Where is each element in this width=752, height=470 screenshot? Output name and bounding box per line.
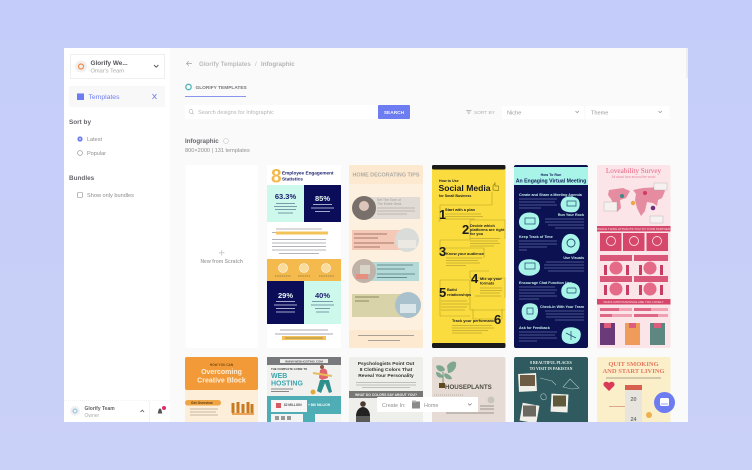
section heading: Infographic <box>185 138 219 145</box>
card: creative block <box>185 357 258 427</box>
card: virtual meeting: Check-In With Your Team <box>540 305 585 309</box>
card: virtual meeting: Encourage Chat Function Use <box>519 281 572 285</box>
card: quit smoking: 24 <box>630 417 637 423</box>
card: social media: for you <box>470 231 484 236</box>
card: web hosting: THE COMPLETE GUIDE TO <box>271 367 308 371</box>
bundles filter: Bundles <box>69 175 95 182</box>
card: social media: Build <box>447 287 457 292</box>
section heading <box>185 138 250 154</box>
card: new from scratch <box>186 165 258 348</box>
card: quit smoking <box>597 357 670 427</box>
bundles filter <box>69 175 134 199</box>
card: employee engagement: Statistics <box>282 176 303 182</box>
card: clothing colors: 8 Clothing Colors That <box>360 367 413 373</box>
sort by filters: Theme <box>591 110 608 116</box>
card: social media: Track your performance <box>452 318 497 323</box>
sort by filters <box>466 106 670 119</box>
card: employee engagement: 29% <box>278 291 293 300</box>
card: virtual meeting: Keep Track of Time <box>519 235 553 239</box>
card: home decorating tips <box>349 165 423 348</box>
tab: glorify templates <box>185 84 248 97</box>
bottom row of template cards <box>185 357 670 427</box>
team selector <box>70 54 164 78</box>
card: new from scratch: New from Scratch <box>200 259 243 265</box>
search bar: SEARCH <box>384 110 405 116</box>
card: creative block: Get Overview <box>191 401 213 405</box>
card: social media: formats <box>480 280 494 286</box>
search bar <box>185 105 410 119</box>
card: creative block: HOW YOU CAN <box>210 363 234 367</box>
card: home decorating tips: The Entire Deck <box>377 202 402 206</box>
card: employee engagement: 8 <box>271 166 282 188</box>
breadcrumb: Infographic <box>261 61 295 68</box>
card: home decorating tips: Set The Tone of <box>377 198 401 202</box>
card: loveability survey <box>597 165 671 348</box>
templates menu item: Templates <box>88 94 120 101</box>
card: virtual meeting: An Engaging Virtual Meeting <box>516 178 586 184</box>
card: social media: Start with a plan <box>445 207 476 212</box>
card: quit smoking: QUIT SMOKING <box>608 361 659 368</box>
card: virtual meeting <box>514 165 588 348</box>
tab: glorify templates: GLORIFY TEMPLATES <box>196 85 248 91</box>
card: places in pakistan <box>514 357 588 427</box>
card: virtual meeting: Run Your Rock <box>558 213 585 217</box>
card: places in pakistan: 8 BEAUTIFUL PLACES <box>530 361 572 365</box>
card: home decorating tips: HOME DECORATING TIPS <box>352 172 420 178</box>
create-in popup: Home <box>424 403 438 409</box>
card: loveability survey: Loveability Survey <box>606 167 662 175</box>
card: loveability survey: WHICH THING ATTRACTS YOU TO YOUR PARTNER <box>597 227 671 231</box>
card: web hosting <box>267 357 341 427</box>
bundles filter: Show only bundles <box>87 193 134 199</box>
card: employee engagement <box>267 165 341 348</box>
card: social media: 5 <box>439 285 446 300</box>
card: social media <box>432 165 506 348</box>
card: employee engagement: Employee Engagement <box>282 170 334 176</box>
card: loveability survey: WHICH MONTHS/ISSUE ARE YOU LOVELY <box>603 300 664 304</box>
card: social media: 6 <box>494 312 501 327</box>
card: social media: for Small Business <box>439 194 471 198</box>
card: creative block: Overcoming <box>201 369 242 376</box>
sort by options <box>69 119 106 157</box>
panel: sidebar <box>64 54 170 422</box>
team selector: Glorify We... <box>90 60 128 67</box>
search bar: Search designs for Infographic <box>198 110 274 116</box>
card: virtual meeting: Ask for Feedback <box>519 326 551 330</box>
card: social media: 3 <box>439 244 446 259</box>
card: clothing colors <box>349 357 423 427</box>
app window <box>64 48 688 422</box>
account footer: Owner <box>84 413 100 419</box>
card: social media: Social Media <box>438 183 491 193</box>
card: virtual meeting: Use Visuals <box>563 256 584 260</box>
app screenshot scene <box>64 48 688 422</box>
card: social media: platforms are right <box>470 227 505 232</box>
sort by options: Popular <box>87 151 106 157</box>
card: web hosting: + $60 MILLION <box>308 403 331 407</box>
create-in popup: Create In: <box>382 403 406 409</box>
card: social media: Mix up your <box>480 276 502 281</box>
card: houseplants <box>432 357 506 427</box>
card: web hosting: $2 MILLION <box>284 403 302 407</box>
card: employee engagement: 40% <box>315 291 330 300</box>
card: loveability survey: All about love around the world <box>612 175 656 179</box>
card: places in pakistan: TO VISIT IN PAKISTAN <box>530 367 573 371</box>
card: employee engagement: 63.3% <box>275 192 296 201</box>
card: web hosting: HOSTING <box>271 380 303 388</box>
card: social media: Know your audience <box>446 251 485 256</box>
breadcrumb: Glorify Templates <box>199 61 251 68</box>
world map <box>608 187 665 216</box>
breadcrumb: / <box>255 61 257 68</box>
card: clothing colors: Reveal Your Personality <box>358 373 414 379</box>
card: social media: 4 <box>471 271 479 286</box>
breadcrumb <box>186 61 295 68</box>
card: creative block: Creative Block <box>197 378 246 384</box>
card: employee engagement: 85% <box>315 194 330 203</box>
create-in popup <box>377 397 478 412</box>
card: virtual meeting: Create and Share a Meeting Agenda <box>519 193 583 197</box>
sort by options: Sort by <box>69 119 91 126</box>
card: social media: relationships <box>447 292 471 297</box>
chat button <box>654 392 675 413</box>
card: social media: Decide which <box>470 223 495 228</box>
section heading: 800×2000 | 131 templates <box>185 148 250 154</box>
card: clothing colors: Psychologists Point Out <box>358 361 415 367</box>
card: web hosting: WWW.WEBHOSTING.COM <box>285 359 323 363</box>
card: quit smoking: AND START LIVING <box>602 368 665 375</box>
templates menu item <box>69 86 165 107</box>
card: virtual meeting: How To Run <box>541 173 561 177</box>
card: social media: 2 <box>462 222 469 237</box>
card: houseplants: HOUSEPLANTS <box>445 384 492 391</box>
team selector: Omar's Team <box>90 68 124 74</box>
sort by filters: SORT BY <box>474 110 496 116</box>
card: quit smoking: 20 <box>630 397 637 403</box>
card: clothing colors: WHAT DO COLORS SAY ABOUT YOU? <box>355 393 417 397</box>
card: social media: 1 <box>439 207 446 222</box>
account footer: Glorify Team <box>84 406 115 412</box>
card: web hosting: WEB <box>271 373 287 380</box>
account footer <box>64 400 170 422</box>
sort by filters: Niche <box>507 110 521 116</box>
card: social media: How to Use <box>439 179 459 183</box>
sort by options: Latest <box>87 137 102 143</box>
